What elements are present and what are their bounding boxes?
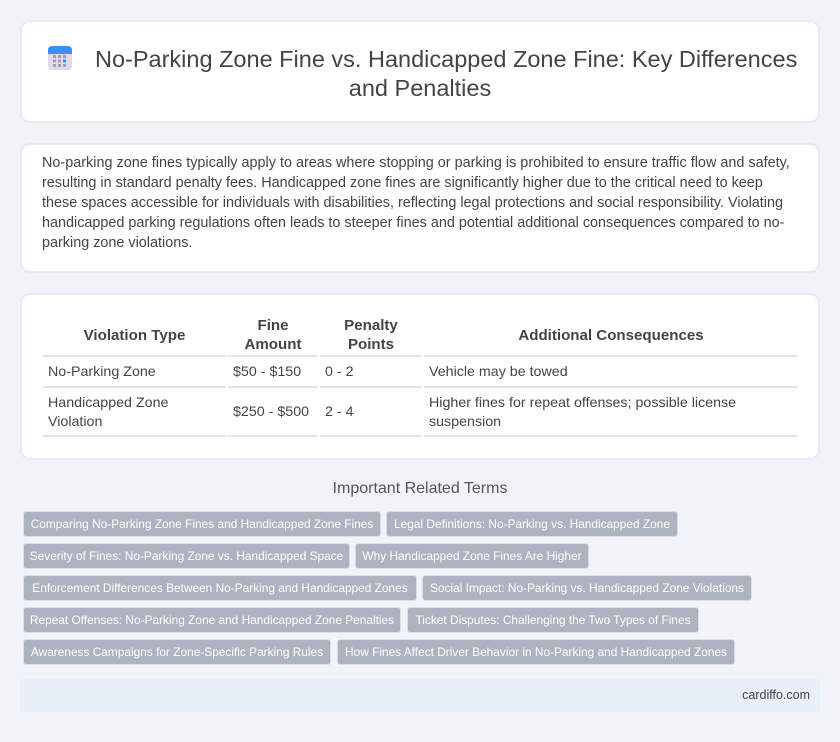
heading: page title: and Penalties: [349, 75, 491, 101]
tag: [23, 543, 350, 569]
tag: Severity of Fines: No-Parking Zone vs. Handicapped Space: [30, 549, 343, 563]
table header: Points: [348, 336, 394, 353]
tag: Social Impact: No-Parking vs. Handicapped Zone Violations: [430, 581, 744, 595]
table row: no-parking zone: Vehicle may be towed: [429, 364, 568, 380]
text block: introduction: these spaces accessible for individuals with disabilities, reflecting legal protections and social responsibility. Violating: [42, 195, 783, 211]
text block: introduction: handicapped parking regulations often leads to steeper fines and potential additional consequences compared to no-: [42, 215, 784, 231]
table row: handicapped zone violation: [48, 395, 736, 430]
tag: [23, 607, 401, 633]
tag: Why Handicapped Zone Fines Are Higher: [362, 549, 582, 563]
tag: [23, 575, 417, 601]
tag: [23, 511, 381, 537]
tag: Repeat Offenses: No-Parking Zone and Handicapped Zone Penalties: [30, 613, 394, 627]
table row: handicapped zone violation: suspension: [429, 414, 501, 430]
tag: Legal Definitions: No-Parking vs. Handicapped Zone: [394, 517, 670, 531]
tag: How Fines Affect Driver Behavior in No-Parking and Handicapped Zones: [345, 645, 727, 659]
table row: handicapped zone violation: Higher fines for repeat offenses; possible license: [429, 395, 736, 411]
tag: [337, 639, 735, 665]
heading: important related terms: Important Related Terms: [333, 480, 507, 497]
panel: comparison table: [20, 293, 820, 460]
table header: Additional Consequences: [518, 327, 704, 344]
tag: [23, 639, 331, 665]
table header: Amount: [244, 336, 302, 353]
tag: Ticket Disputes: Challenging the Two Types of Fines: [415, 613, 691, 627]
related term tags: [23, 511, 752, 665]
table row: no-parking zone: $50 - $150: [233, 364, 301, 380]
text block: introduction: [42, 155, 790, 251]
heading: page title: [95, 46, 797, 101]
table header: Fine: [257, 317, 289, 334]
table row: handicapped zone violation: $250 - $500: [233, 404, 309, 420]
tag: Enforcement Differences Between No-Parking and Handicapped Zones: [32, 581, 408, 595]
panel: introduction text: [20, 143, 820, 273]
text block: introduction: parking zone violations.: [42, 235, 192, 251]
table row: handicapped zone violation: Handicapped Zone: [48, 395, 168, 411]
icon: calendar: [48, 46, 72, 70]
table header: Violation Type: [84, 327, 185, 344]
text block: introduction: No-parking zone fines typically apply to areas where stopping or parking is prohibited to ensure traffic flow and safety,: [42, 155, 790, 171]
tag: [422, 575, 752, 601]
tag: Awareness Campaigns for Zone-Specific Parking Rules: [31, 645, 323, 659]
table header: Penalty: [344, 317, 398, 334]
table row: handicapped zone violation: Violation: [48, 414, 102, 430]
table row: no-parking zone: No-Parking Zone: [48, 364, 156, 380]
footer: site name: cardiffo.com: [742, 688, 810, 702]
tag: Comparing No-Parking Zone Fines and Handicapped Zone Fines: [31, 517, 373, 531]
text block: introduction: resulting in standard penalty fees. Handicapped zone fines are significantly higher due to the critical need to keep: [42, 175, 763, 191]
table row: no-parking zone: [48, 364, 568, 380]
table header: [84, 317, 704, 353]
table row: handicapped zone violation: 2 - 4: [325, 404, 354, 420]
panel: title header: [20, 20, 820, 123]
footer bar: [20, 679, 820, 712]
table row: no-parking zone: 0 - 2: [325, 364, 354, 380]
tag: [407, 607, 699, 633]
tag: [386, 511, 678, 537]
tag: [355, 543, 589, 569]
table: violations comparison: [43, 317, 798, 437]
heading: page title: No-Parking Zone Fine vs. Handicapped Zone Fine: Key Differences: [95, 46, 797, 72]
